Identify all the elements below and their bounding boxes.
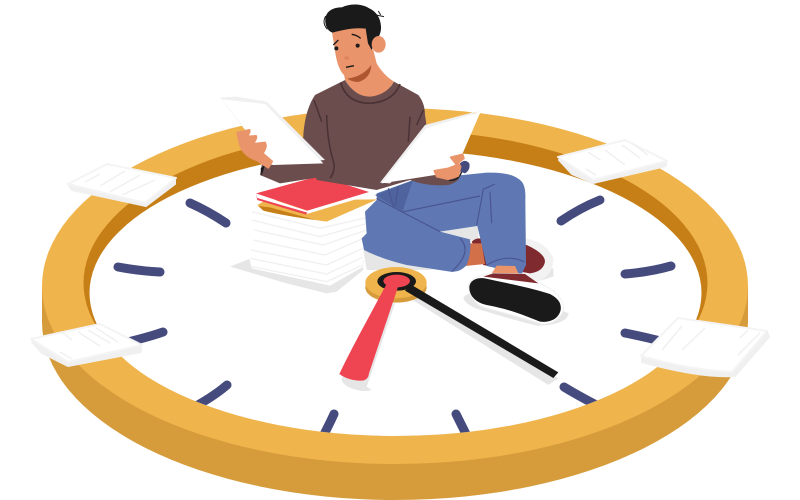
jeans [362,173,526,274]
folder [257,199,377,222]
left hand [237,130,272,168]
minute hand [405,284,558,378]
hair [325,4,381,50]
sweater [260,80,462,190]
paper sheet: bottom right [641,318,769,376]
eyes and brows [334,46,338,50]
paper sheet: top right [558,140,667,183]
sleeve cuff of far arm [460,161,470,173]
paper stack [248,201,372,286]
right hand [434,154,464,179]
clock tick marks [115,200,680,446]
clock body [42,108,748,500]
neck [342,50,394,97]
paper sheet: bottom left [31,324,142,366]
floor shadows [230,226,569,391]
paper sheet: top left [68,164,176,206]
back shoe [465,238,553,282]
head [324,4,386,82]
man upper body [220,4,482,190]
right paper [380,110,482,183]
left paper [220,97,325,165]
book [256,176,369,215]
clock centre, hands, stack and legs [230,173,569,391]
ear [372,36,386,53]
clock hub [365,267,427,303]
front shoe and ankle [468,266,564,324]
hour hand [339,283,399,381]
